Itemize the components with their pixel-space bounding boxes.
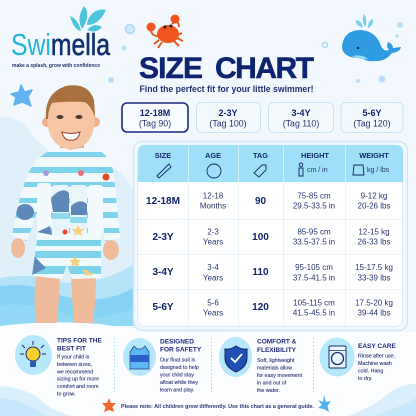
table header: TAG — [253, 151, 268, 160]
logo splash — [70, 6, 106, 31]
row 12-18M: 90 — [255, 196, 266, 207]
row 5-6Y: 5-6Y — [152, 302, 174, 313]
tab 3-4Y: 3-4Y — [291, 108, 311, 118]
crab — [146, 14, 183, 48]
row 3-4Y: Years — [203, 274, 223, 282]
row 5-6Y: 105-115 cm — [293, 298, 335, 308]
tab 12-18M — [122, 103, 188, 132]
body text: your child stay — [160, 372, 194, 378]
row 2-3Y: 26-33 lbs — [358, 238, 390, 246]
tab 2-3Y: 2-3Y — [218, 108, 238, 118]
float panels — [37, 183, 103, 236]
row 5-6Y: 5-6 — [207, 298, 219, 308]
icon: shield — [219, 337, 252, 377]
row 2-3Y: 2-3Y — [152, 232, 174, 243]
row 12-18M: 20-26 lbs — [358, 202, 390, 210]
row 5-6Y — [152, 298, 393, 318]
tip: easy care — [320, 338, 396, 382]
heading: FOR SAFETY — [160, 346, 202, 354]
dotted dividers — [114, 338, 314, 392]
row 3-4Y: 3-4Y — [152, 267, 174, 278]
note text: Please note: All children grow differently. Use this chart as a general guide. — [121, 404, 314, 410]
title: SIZE — [139, 52, 203, 85]
table header: cm / in — [307, 167, 328, 174]
tab 12-18M: (Tag 90) — [139, 118, 171, 128]
row 12-18M: 29.5-33.5 in — [293, 202, 335, 210]
starfish blue — [318, 395, 331, 412]
row 5-6Y: Years — [203, 308, 223, 318]
table header: AGE — [205, 151, 221, 160]
tab 3-4Y: (Tag 110) — [283, 118, 319, 128]
bottom white band — [0, 322, 416, 416]
starfish left — [11, 85, 32, 106]
row 2-3Y: Years — [203, 238, 223, 246]
logo wordmark: Swimella — [11, 27, 111, 62]
heading: BEST FIT — [57, 346, 86, 352]
icon: washing machine — [320, 338, 354, 376]
starfish orange — [102, 398, 116, 412]
row 2-3Y: 100 — [252, 232, 269, 243]
body text: If your child is — [57, 354, 90, 360]
body text: Soft, lightweight — [257, 358, 295, 364]
row 12-18M: 12-18 — [203, 192, 224, 200]
row 12-18M: 9-12 kg — [361, 192, 387, 200]
tip: safety — [123, 338, 202, 394]
tab 3-4Y — [268, 102, 334, 132]
body text: cold. Hang — [358, 368, 383, 374]
left wave backdrop — [0, 117, 134, 326]
swimsuit with stripes — [12, 148, 120, 279]
icon: float vest — [123, 338, 156, 376]
row 2-3Y: 85-95 cm — [297, 228, 331, 236]
heading: FLEXIBILITY — [257, 347, 297, 354]
icon: weight bag — [353, 165, 364, 175]
row 12-18M: 12-18M — [146, 196, 180, 207]
table header: WEIGHT — [359, 151, 389, 160]
size tabs — [122, 102, 403, 132]
body text: Machine wash — [358, 361, 392, 367]
row 3-4Y: 110 — [252, 267, 269, 278]
icon: baby face — [207, 164, 221, 178]
bubbles — [108, 22, 403, 83]
row 3-4Y: 33-39 lbs — [358, 274, 390, 282]
heading: TIPS FOR THE — [57, 338, 102, 344]
row 5-6Y: 17.5-20 kg — [355, 298, 393, 308]
body text: we recommend — [57, 370, 93, 376]
icon: child — [299, 163, 303, 176]
icon: light bulb — [15, 335, 52, 375]
body text: designed to help — [160, 365, 199, 371]
table header: SIZE — [155, 151, 171, 160]
tip: best fit — [15, 335, 102, 398]
heading: COMFORT & — [257, 338, 297, 346]
heading: DESIGNED — [160, 338, 194, 346]
row 12-18M: Months — [200, 202, 226, 210]
neck — [60, 140, 84, 154]
row 3-4Y: 95-105 cm — [295, 263, 333, 272]
body text: Rinse after use. — [358, 354, 395, 360]
logo tagline: make a splash, grow with confidence — [12, 63, 100, 69]
body text: comfort and room — [57, 384, 99, 390]
row 5-6Y: 39-44 lbs — [358, 308, 390, 318]
row 3-4Y: 15-17.5 kg — [355, 263, 393, 272]
row 3-4Y — [152, 263, 393, 282]
table header: HEIGHT — [301, 151, 329, 160]
tab 5-6Y: (Tag 120) — [353, 118, 391, 128]
table header — [138, 145, 403, 182]
body text: afloat while they — [160, 380, 198, 386]
body text: sizing up for more — [57, 376, 99, 382]
tab 5-6Y: 5-6Y — [362, 108, 382, 118]
row 3-4Y: 3-4 — [207, 263, 219, 272]
whale — [342, 14, 401, 61]
icon: tag — [254, 165, 266, 177]
body text: to dry. — [358, 376, 372, 382]
row 2-3Y: 33.5-37.5 in — [293, 238, 335, 246]
row 3-4Y: 37.5-41.5 in — [293, 274, 335, 282]
heading: EASY CARE — [358, 343, 396, 350]
body text: in and out of — [257, 380, 287, 386]
body text: materials allow — [257, 366, 292, 372]
row 2-3Y: 2-3 — [207, 228, 219, 236]
title: CHART — [215, 52, 314, 85]
subtitle: Find the perfect fit for your little swimmer! — [140, 84, 314, 94]
logo — [11, 6, 111, 69]
body text: to grow. — [57, 392, 76, 398]
body text: learn and play. — [160, 388, 194, 394]
row 12-18M — [146, 192, 390, 210]
body text: for easy movement — [257, 373, 303, 379]
tab 12-18M: 12-18M — [140, 108, 170, 118]
row 12-18M: 75-85 cm — [297, 192, 331, 200]
head — [42, 85, 100, 149]
row 5-6Y: 41.5-45.5 in — [293, 308, 335, 318]
row 5-6Y: 120 — [252, 302, 269, 313]
size table — [134, 142, 408, 330]
icon: ruler — [157, 164, 171, 178]
row 2-3Y — [152, 228, 390, 246]
tab 2-3Y: (Tag 100) — [209, 118, 247, 128]
body text: Our float suit is — [160, 358, 196, 364]
body text: between sizes, — [57, 362, 92, 368]
bottom corner waves — [0, 384, 416, 416]
boy in swimsuit — [11, 85, 120, 323]
tab 2-3Y — [196, 102, 260, 132]
tip: comfort — [219, 337, 303, 394]
table grid — [138, 146, 403, 326]
row 2-3Y: 12-15 kg — [358, 228, 390, 236]
table header: kg / lbs — [367, 167, 390, 174]
tab 5-6Y — [341, 102, 403, 132]
body text: the water. — [257, 388, 280, 394]
legs — [34, 275, 96, 323]
hands — [11, 238, 119, 260]
